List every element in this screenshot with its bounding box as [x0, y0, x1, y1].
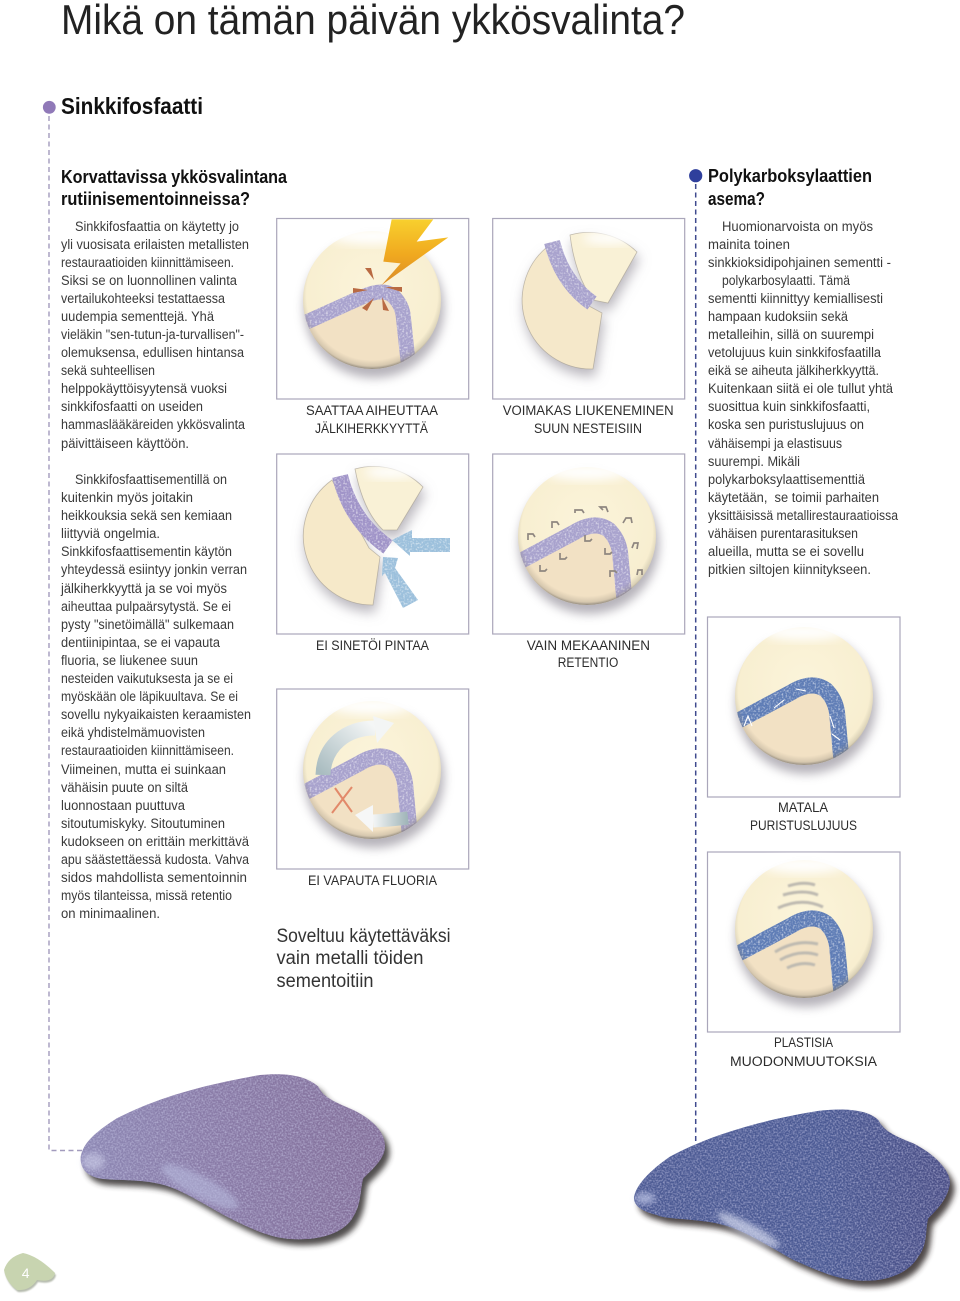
- text block: left column paragraph 2: Viimeinen, mutta ei suinkaan: [61, 762, 226, 777]
- caption: PLASTISIA: [774, 1035, 833, 1050]
- text block: right column: alueilla, mutta se ei sovellu: [708, 544, 864, 559]
- text block: left column paragraph 1: olemuksensa, edullisen hintansa: [61, 345, 244, 360]
- text block: right column: sementti kiinnittyy kemiallisesti: [708, 291, 883, 306]
- text block: left column paragraph 2: [60, 472, 251, 921]
- text block: left column paragraph 2: sovellu nykyaikaisten keraamisten: [61, 707, 251, 722]
- text block: right column: mainita toinen: [708, 237, 790, 252]
- blob: polykarboksylaatti cement sample: [634, 1109, 955, 1287]
- text block: left column paragraph 2: vähäisin puute on siltä: [61, 780, 188, 795]
- text block: left column paragraph 1: yli vuosisata erilaisten metallisten: [61, 237, 249, 252]
- caption: RETENTIO: [558, 655, 618, 670]
- text block: left column paragraph 2: heikkouksia sekä sen kemiaan: [61, 508, 232, 523]
- text block: suitability note: Soveltuu käytettäväksi: [276, 926, 450, 947]
- text block: right column: vähäisen purentarasituksen: [708, 526, 858, 541]
- icon: tooth disc with hooks: [515, 464, 659, 614]
- text block: right column: Kuitenkaan siitä ei ole tullut yhtä: [708, 381, 893, 396]
- caption: MUODONMUUTOKSIA: [730, 1054, 877, 1069]
- caption: VOIMAKAS LIUKENEMINEN: [503, 403, 674, 418]
- icon: tooth disc with lightning: [300, 228, 444, 378]
- caption: [527, 638, 650, 670]
- text block: left column paragraph 2: Sinkkifosfaattisementin käytön: [61, 544, 232, 559]
- blob: sinkkifosfaatti cement sample: [81, 1074, 390, 1245]
- caption: JÄLKIHERKKYYTTÄ: [315, 421, 428, 436]
- text block: left column paragraph 1: päivittäiseen käyttöön.: [61, 436, 189, 451]
- caption: [503, 403, 674, 436]
- text block: left column paragraph 2: apu säästettäessä kudosta. Vahva: [61, 852, 249, 867]
- text block: right column: polykarboksylaattisementtiä: [708, 472, 865, 487]
- text block: left column paragraph 2: myös tilanteissa, missä retentio: [61, 888, 232, 903]
- bullet: polykarboksylaatti: [689, 169, 702, 182]
- text block: left column paragraph 2: liittyviä ongelmia.: [61, 526, 160, 541]
- caption: EI VAPAUTA FLUORIA: [308, 873, 437, 888]
- caption: EI SINETÖI PINTAA: [316, 638, 429, 653]
- text block: left column paragraph 1: Sinkkifosfaattia on käytetty jo: [75, 219, 239, 234]
- text block: left column paragraph 1: uudempia sementtejä. Yhä: [61, 309, 214, 324]
- text block: left column paragraph 2: on minimaalinen.: [61, 906, 160, 921]
- dashed connector: sinkkifosfaatti: [49, 116, 84, 1150]
- text block: left column paragraph 1: restauraatioiden kiinnittämiseen.: [61, 255, 234, 270]
- arrow: lower: [355, 805, 408, 832]
- text block: left column paragraph 2: kudokseen on erittäin merkittävä: [61, 834, 249, 849]
- text block: suitability note: sementoitiin: [276, 971, 374, 992]
- text block: right column: suurempi. Mikäli: [708, 454, 800, 469]
- panel: voimakas liukeneminen: [493, 218, 685, 436]
- text block: left column paragraph 2: dentiinipintaa, se ei vapauta: [61, 635, 220, 650]
- text block: left column paragraph 2: eikä yhdistelmämuovisten: [61, 725, 205, 740]
- text block: left column paragraph 2: kuitenkin myös joitakin: [61, 490, 193, 505]
- text block: left column paragraph 2: luonnostaan puuttuva: [61, 798, 185, 813]
- text block: left column paragraph 2: jälkiherkkyyttä ja se voi myös: [60, 581, 227, 596]
- text block: right column: vähäisempi ja elastisuus: [708, 436, 842, 451]
- icon: lightning bolt: [382, 219, 448, 285]
- panel: vain mekaaninen retentio: [493, 454, 685, 670]
- page number: 4: [22, 1265, 30, 1281]
- text block: left column paragraph 2: myöskään ole läpikuultava. Se ei: [61, 689, 238, 704]
- panel: matala puristuslujuus: [708, 617, 900, 833]
- arrow: horizontal: [392, 530, 450, 556]
- text block: left column paragraph 1: hammaslääkäreiden ykkösvalinta: [61, 417, 245, 432]
- heading: Polykarboksylaattien asema: asema?: [708, 189, 765, 209]
- text block: left column paragraph 2: sitoutumiskyky. Sitoutuminen: [61, 816, 225, 831]
- text block: left column paragraph 2: aiheuttaa pulpaärsytystä. Se ei: [61, 599, 231, 614]
- text block: right column: vetolujuus kuin sinkkifosfaatilla: [708, 345, 881, 360]
- text block: left column paragraph 1: [61, 219, 249, 451]
- text block: right column: yksittäisissä metallirestauraatioissa: [708, 508, 898, 523]
- text block: left column paragraph 1: helppokäyttöisyytensä vuoksi: [61, 381, 227, 396]
- text block: right column: suosittua kuin sinkkifosfaatti,: [708, 399, 870, 414]
- icon: red cross: [332, 787, 352, 813]
- text block: right column: [708, 219, 898, 577]
- icon: tooth disc with cracked blue band: [732, 624, 876, 774]
- text block: left column paragraph 2: yhteydessä esiintyy jonkin verran: [61, 562, 247, 577]
- subheading: left column: Korvattavissa ykkösvalintana: [61, 167, 288, 187]
- arrow: curved upper: [323, 716, 394, 775]
- heading: Sinkkifosfaatti: Sinkkifosfaatti: [61, 93, 203, 119]
- page number blob: [4, 1253, 56, 1292]
- caption: MATALA: [778, 800, 828, 815]
- subheading: left column: rutiinisementoinneissa?: [61, 189, 250, 209]
- text block: left column paragraph 2: nesteiden vaikutuksesta ja se ei: [61, 671, 233, 686]
- text block: left column paragraph 2: Sinkkifosfaattisementillä on: [75, 472, 227, 487]
- subheading: left column: [61, 167, 288, 209]
- bullet: sinkkifosfaatti: [43, 101, 56, 114]
- icon: split tooth disc with blue arrows: [303, 466, 450, 608]
- panel: ei vapauta fluoria: [277, 689, 469, 888]
- text block: suitability note: vain metalli töiden: [276, 948, 424, 969]
- caption: [730, 1035, 877, 1069]
- caption: PURISTUSLUJUUS: [750, 818, 857, 833]
- caption: VAIN MEKAANINEN: [527, 638, 650, 653]
- text block: right column: Huomionarvoista on myös: [722, 219, 873, 234]
- panel: saattaa aiheuttaa jälkiherkkyyttä: [277, 218, 469, 436]
- dashed connector: polykarboksylaatti: [695, 184, 697, 1143]
- text block: right column: pitkien siltojen kiinnitykseen.: [708, 562, 871, 577]
- heading: Polykarboksylaattien asema: Polykarboksylaattien: [708, 166, 872, 186]
- text block: left column paragraph 2: sidos mahdollista sementoinnin: [61, 870, 247, 885]
- caption: SUUN NESTEISIIN: [534, 421, 642, 436]
- arrow: diagonal: [382, 557, 418, 608]
- caption: [306, 403, 438, 436]
- panel: ei sinetöi pintaa: [277, 454, 469, 653]
- text block: right column: metalleihin, sillä on suurempi: [708, 327, 874, 342]
- text block: left column paragraph 1: sekä suhteellisen: [61, 363, 155, 378]
- text block: right column: koska sen puristuslujuus on: [708, 417, 864, 432]
- text block: left column paragraph 1: sinkkifosfaatti on useiden: [61, 399, 203, 414]
- heading: Polykarboksylaattien asema: [708, 166, 872, 209]
- icon: tooth disc with deformation waves: [732, 857, 876, 1007]
- icon: tooth disc with arrows and cross: [300, 698, 444, 848]
- caption: SAATTAA AIHEUTTAA: [306, 403, 438, 418]
- text block: left column paragraph 1: vertailukohteeksi testattaessa: [61, 291, 225, 306]
- panel: plastisia muodonmuutoksia: [708, 852, 900, 1069]
- text block: right column: käytetään, se toimii parhaiten: [708, 490, 879, 505]
- icon: eroded tooth disc: [522, 232, 637, 369]
- text block: right column: sinkkioksidipohjainen sementti -: [708, 255, 891, 270]
- text block: right column: hampaan kudoksiin sekä: [708, 309, 848, 324]
- text block: left column paragraph 2: pysty "sinetöimällä" sulkemaan: [61, 617, 234, 632]
- text block: right column: polykarbosylaatti. Tämä: [722, 273, 850, 288]
- text block: left column paragraph 1: Siksi se on luonnollinen valinta: [61, 273, 237, 288]
- text block: left column paragraph 2: fluoria, se liukenee suun: [61, 653, 198, 668]
- text block: right column: eikä se aiheuta jälkiherkkyyttä.: [708, 363, 879, 378]
- text block: left column paragraph 1: vieläkin "sen-tutun-ja-turvallisen"-: [61, 327, 244, 342]
- text block: suitability note: [276, 926, 450, 992]
- caption: [750, 800, 857, 833]
- text block: left column paragraph 2: restauraatioiden kiinnittämiseen.: [61, 743, 234, 758]
